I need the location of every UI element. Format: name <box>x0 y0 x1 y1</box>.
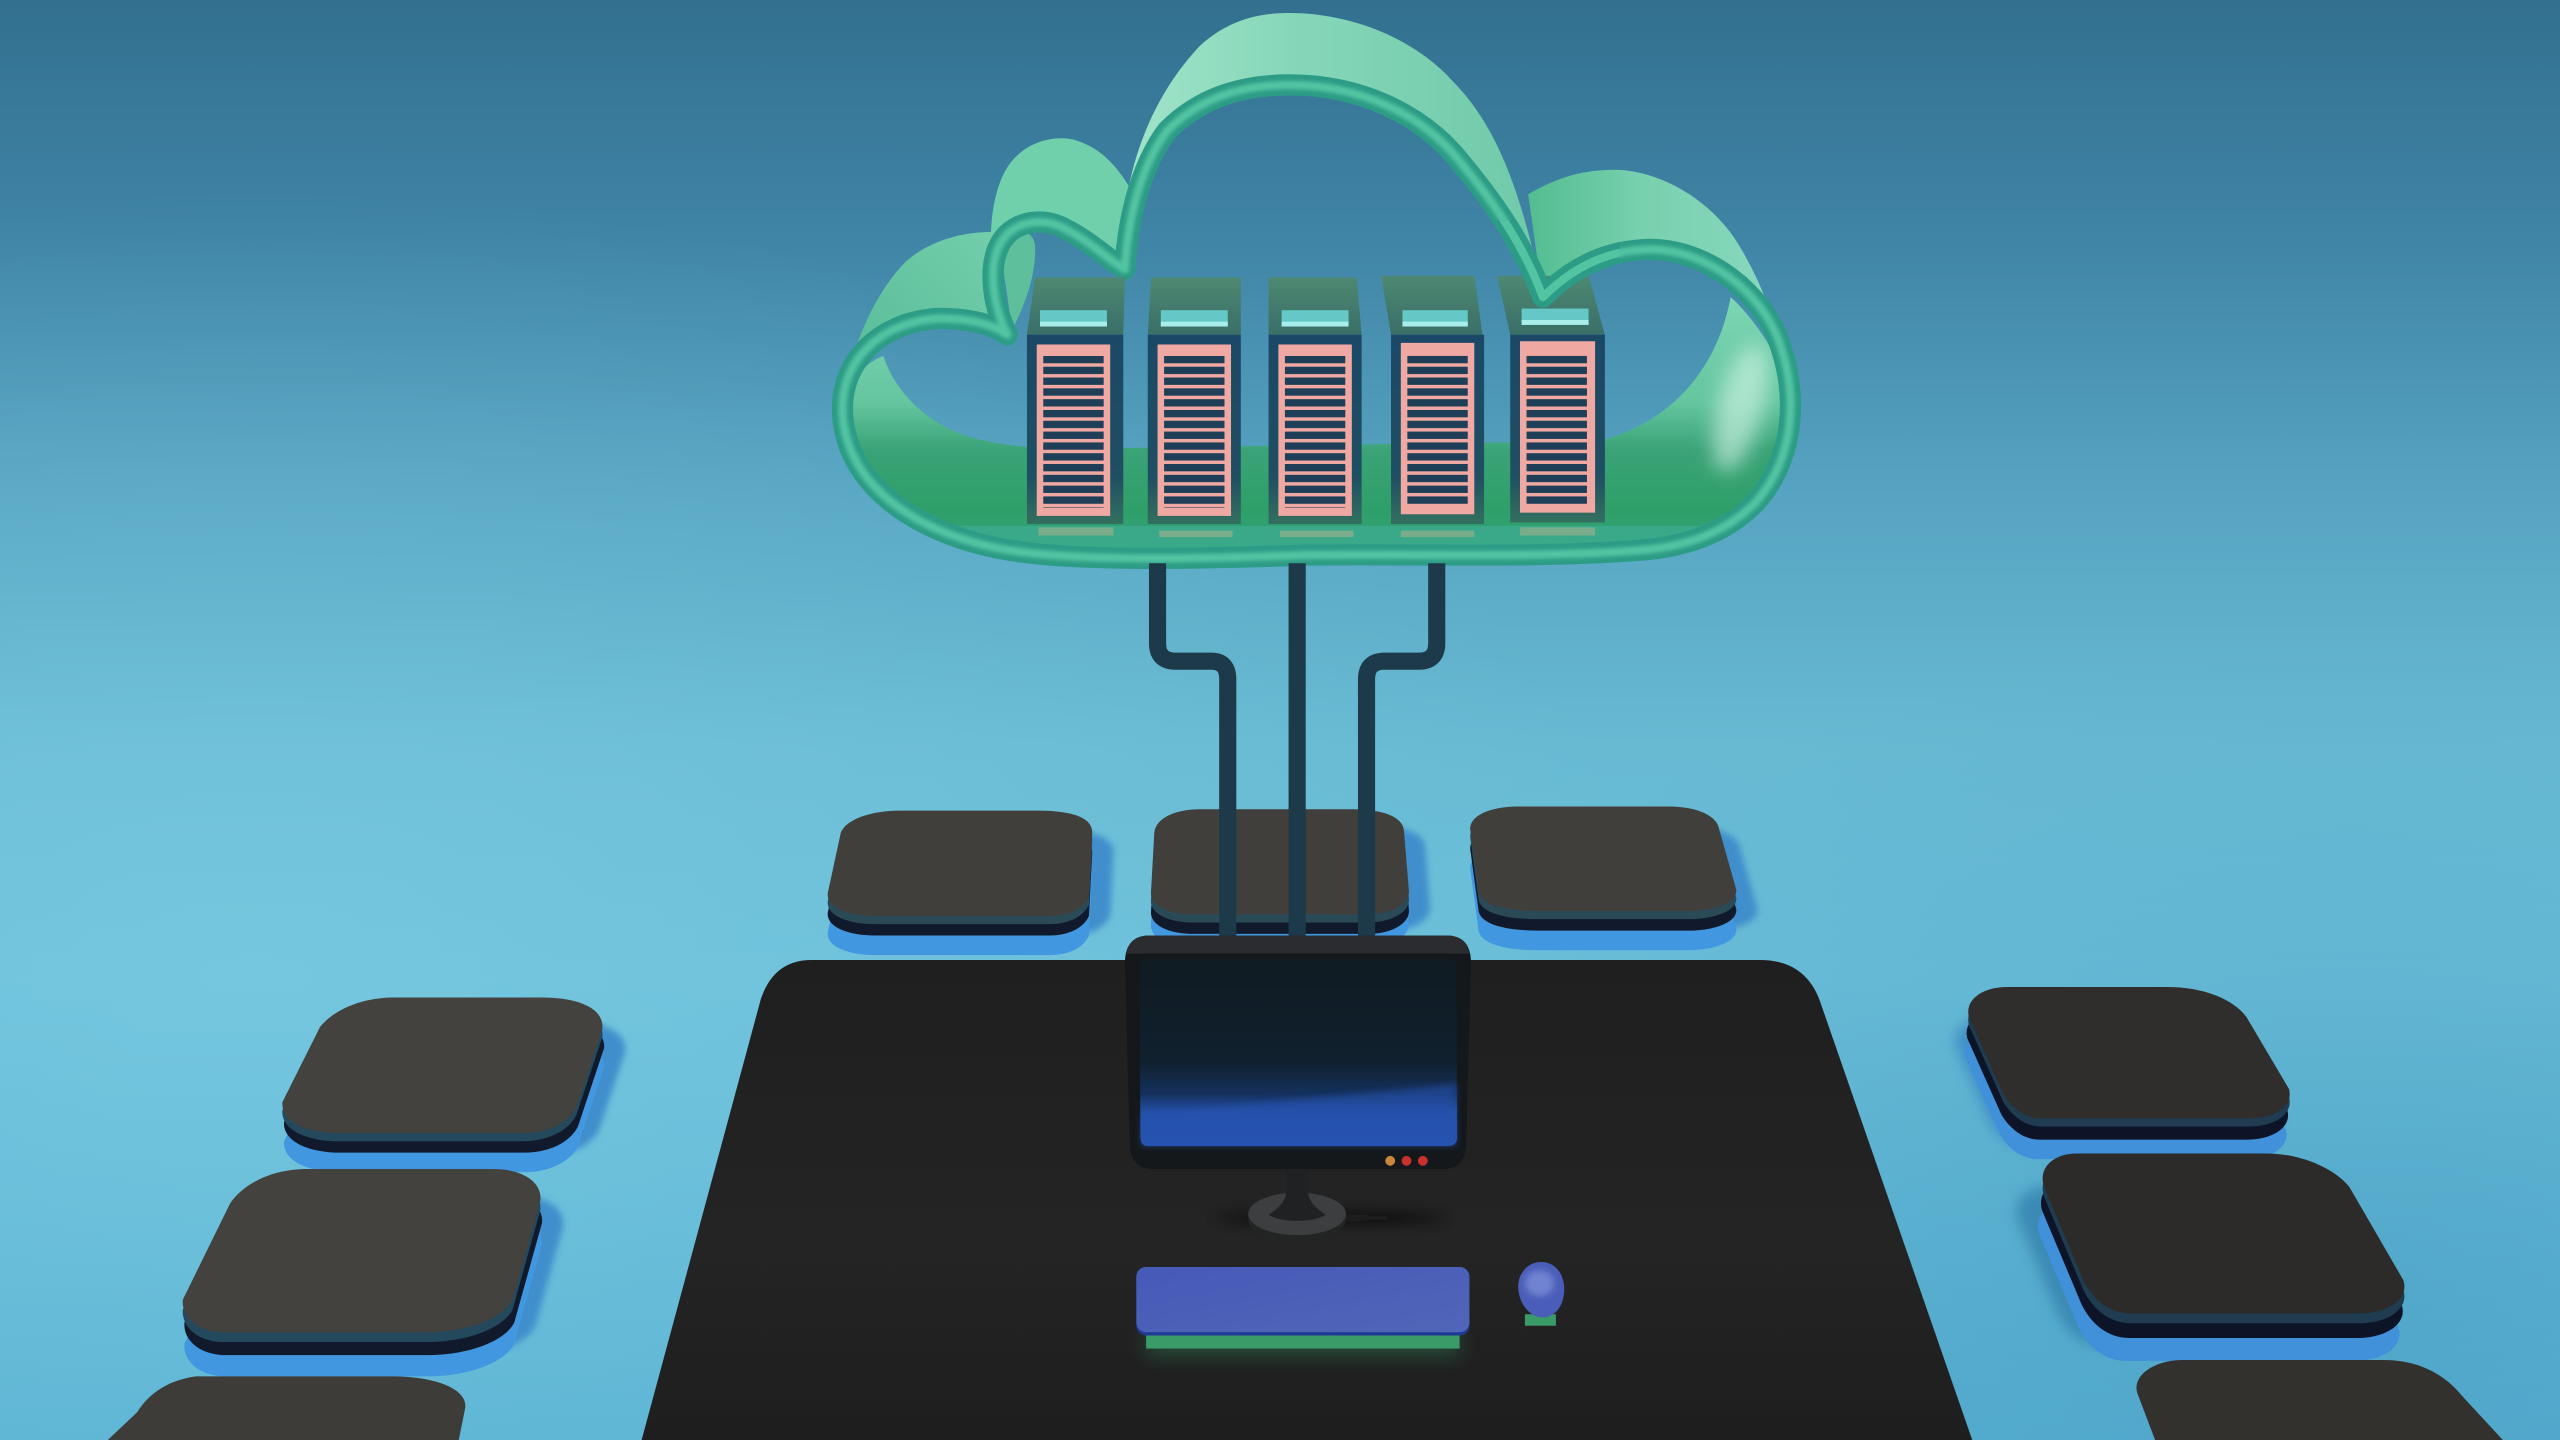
cable: centre <box>1292 563 1302 947</box>
server rack 2 <box>1148 278 1241 524</box>
cloud: right cusp overlapping server 5 <box>1498 220 1620 308</box>
pad: top row right <box>1470 807 1758 950</box>
cable: left <box>1158 563 1228 947</box>
desk: large dark table <box>642 960 1972 1440</box>
mouse <box>1518 1262 1564 1326</box>
pad: left column lower <box>108 1376 465 1440</box>
server rack 5 <box>1497 276 1605 522</box>
pad: top row centre <box>1151 809 1430 947</box>
monitor bezel <box>1125 936 1471 1169</box>
pad: left column upper <box>282 998 625 1172</box>
monitor stand <box>1216 1169 1445 1241</box>
server rack 3 <box>1269 278 1362 524</box>
server rack 1 <box>1027 278 1125 524</box>
monitor screen highlight <box>1141 1084 1456 1146</box>
server rack 4 <box>1381 276 1484 524</box>
cloud ribbon: back surfaces <box>842 13 1793 559</box>
cloud: shelf front band <box>955 526 1706 558</box>
cable: right <box>1367 563 1437 947</box>
pad: right column middle <box>2017 1153 2404 1361</box>
cloud: green ribbon with servers <box>842 13 1793 559</box>
pad: left column middle <box>183 1169 563 1376</box>
pad: right column upper <box>1955 987 2290 1159</box>
cables: cloud to monitor <box>1158 563 1437 947</box>
monitor <box>1125 936 1471 1241</box>
monitor screen <box>1140 958 1457 1146</box>
server reflections on shelf <box>1038 527 1595 537</box>
monitor buttons <box>1385 1156 1428 1166</box>
pad: top row left <box>828 811 1113 955</box>
keyboard <box>1136 1267 1469 1355</box>
cloud ribbon: front rim <box>842 85 1790 558</box>
pad: right column lower <box>2136 1360 2503 1440</box>
